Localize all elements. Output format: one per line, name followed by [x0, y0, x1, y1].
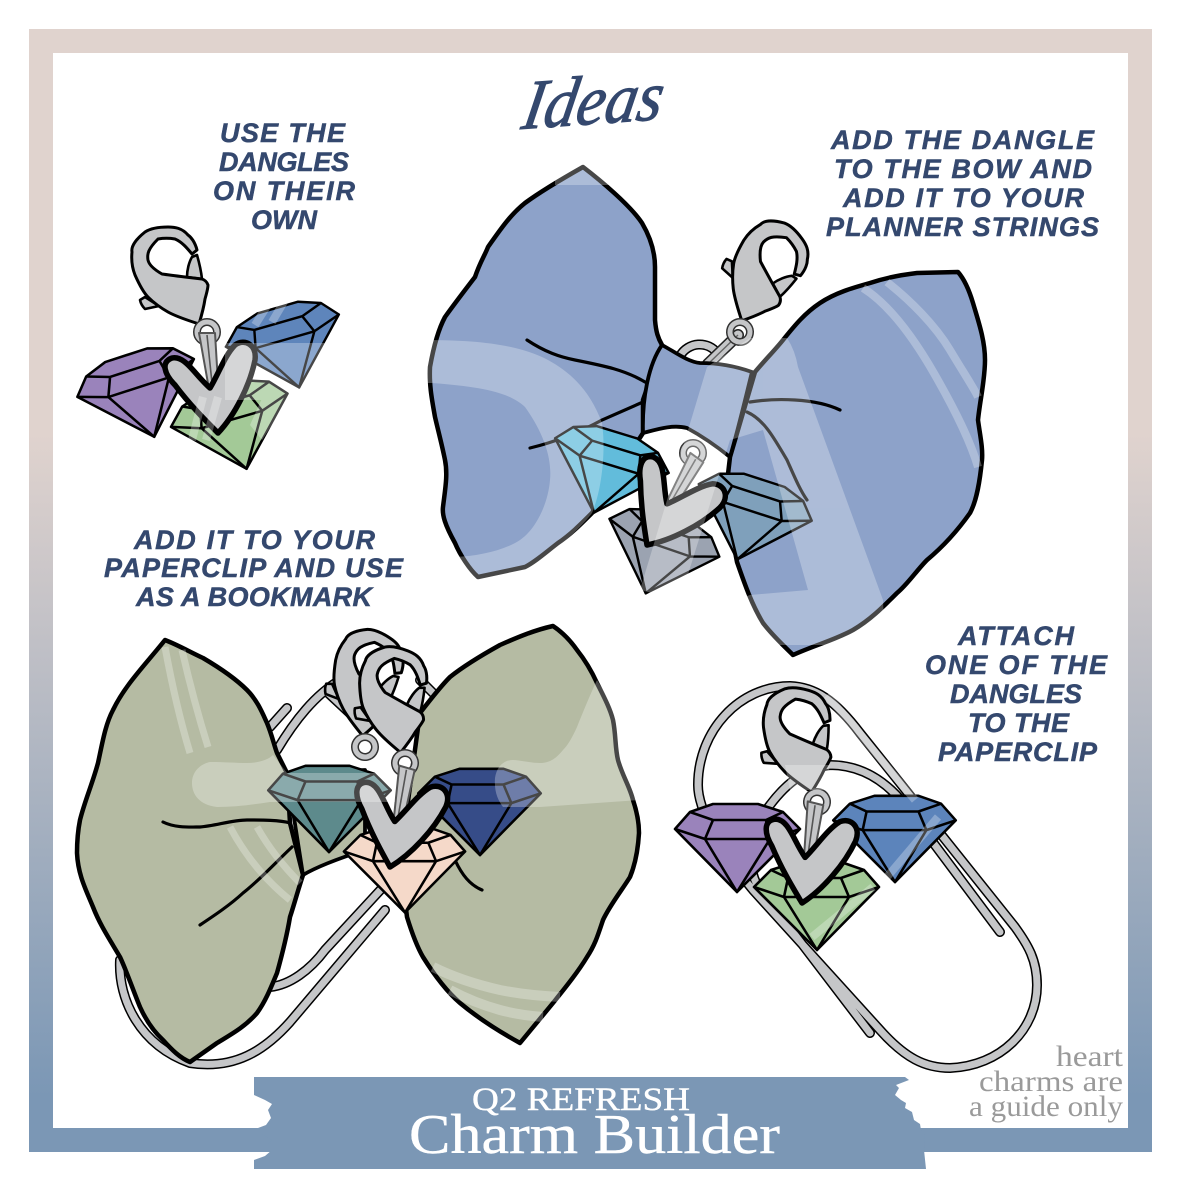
right green wing	[400, 626, 639, 1043]
dangle on paperclip	[675, 680, 956, 950]
caption: dangles on their own: DANGLES	[219, 147, 349, 177]
bow knot	[643, 345, 752, 457]
footnote: charms are	[979, 1065, 1123, 1098]
dangles on green bow	[268, 618, 541, 913]
charm: dangle on its own	[70, 227, 355, 486]
blue bow with dangle	[425, 145, 985, 655]
paperclip with dangle	[675, 680, 1037, 1068]
caption: dangles on their own: OWN	[251, 205, 318, 235]
caption: bow and planner strings	[826, 125, 1099, 242]
caption: paperclip bookmark: PAPERCLIP AND USE	[104, 553, 404, 583]
paperclip wire	[698, 686, 1037, 1068]
left green wing	[77, 640, 303, 1062]
caption: attach to the paperclip: TO THE	[968, 708, 1070, 738]
caption: attach to the paperclip: PAPERCLIP	[938, 737, 1098, 767]
dangle on bow	[538, 209, 831, 612]
bow fold lines	[527, 340, 840, 500]
caption: dangles on their own: USE THE	[220, 118, 346, 148]
caption: bow and planner strings: ADD IT TO YOUR	[842, 183, 1084, 213]
right bow wing	[725, 272, 985, 655]
title banner	[254, 1077, 926, 1169]
footnote: heart	[1056, 1040, 1124, 1073]
caption: dangles on their own: ON THEIR	[213, 176, 356, 206]
left bow wing	[430, 167, 662, 577]
bow ring and hook behind knot	[680, 335, 738, 364]
caption: attach to the paperclip: ONE OF THE	[925, 650, 1108, 680]
caption: bow and planner strings: TO THE BOW AND	[834, 154, 1092, 184]
caption: bow and planner strings: ADD THE DANGLE	[830, 125, 1095, 155]
watermark over paperclip	[785, 695, 938, 937]
watermark over green bow	[165, 647, 640, 1017]
banner subtitle: Q2 REFRESH	[472, 1082, 690, 1118]
caption: attach to the paperclip	[925, 621, 1108, 767]
banner heading: Charm Builder	[409, 1104, 780, 1166]
watermark over charm	[192, 300, 350, 440]
watermark over blue bow	[425, 145, 978, 645]
link from gem dangle ring to knot	[683, 443, 703, 463]
paperclip behind bow	[120, 680, 433, 1064]
green fold lines	[163, 820, 482, 925]
caption: paperclip bookmark	[104, 525, 404, 612]
green bow on paperclip with dangles	[77, 618, 640, 1064]
caption: dangles on their own	[213, 118, 356, 235]
caption: paperclip bookmark: ADD IT TO YOUR	[133, 525, 376, 555]
caption: bow and planner strings: PLANNER STRINGS	[826, 212, 1099, 242]
caption: attach to the paperclip: DANGLES	[950, 679, 1082, 709]
caption: paperclip bookmark: AS A BOOKMARK	[135, 582, 374, 612]
caption: attach to the paperclip: ATTACH	[957, 621, 1074, 651]
torn tape	[254, 1077, 926, 1169]
title: Ideas	[516, 57, 671, 145]
footnote: a guide only	[969, 1090, 1123, 1123]
green knot	[287, 770, 365, 875]
footnote	[969, 1040, 1124, 1123]
